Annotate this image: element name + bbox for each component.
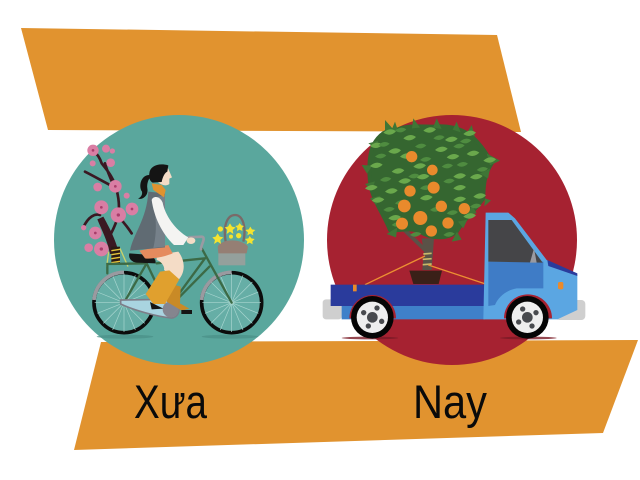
wheel shadows [342,337,557,339]
icon: peach blossom branch [81,145,138,267]
cab door [488,262,543,306]
saddle [129,253,156,263]
trunk [403,230,434,270]
lower rail [342,306,485,319]
scarf [152,183,166,197]
teal circle background [54,115,304,365]
oranges [396,151,470,237]
red circle background [327,115,577,365]
icon: bicycle frame [107,248,232,308]
far leg [167,283,189,311]
label: Nay: Nay [413,375,487,428]
ropes [365,256,486,285]
cab body [483,213,577,319]
hair [149,164,168,183]
chain guard [121,299,179,318]
cab window [488,220,543,263]
vest [130,192,165,251]
illustration: pickup truck carrying a kumquat tree [323,118,585,339]
icon: truck [323,213,585,339]
icon: rear wheel [94,272,154,333]
figure: woman [130,164,195,314]
indicator lights [558,282,563,289]
face [157,167,172,185]
rear bumper [323,299,342,319]
label: Xưa: Xưa [134,375,208,428]
rear wheel [351,296,394,339]
icon: tree [362,118,500,284]
edge leaves [362,118,500,242]
top orange banner [21,28,521,132]
hood stripe [547,260,577,276]
wheel shadows [97,335,258,339]
light leaves [365,127,496,220]
icon: flower basket [212,215,255,265]
handlebar [188,237,204,249]
arm [152,197,188,245]
illustration: woman riding a bicycle [81,145,262,339]
mid leaves [375,128,488,237]
wheel arches [349,295,396,318]
canopy [369,126,492,237]
branch tie [111,247,120,264]
front wheel [506,296,549,339]
icon: front wheel [202,272,262,333]
cargo bed [331,285,485,306]
pot [409,271,442,284]
near leg [157,252,184,280]
bottom orange banner [74,340,638,450]
skirt [139,245,173,259]
front bumper [555,300,585,320]
